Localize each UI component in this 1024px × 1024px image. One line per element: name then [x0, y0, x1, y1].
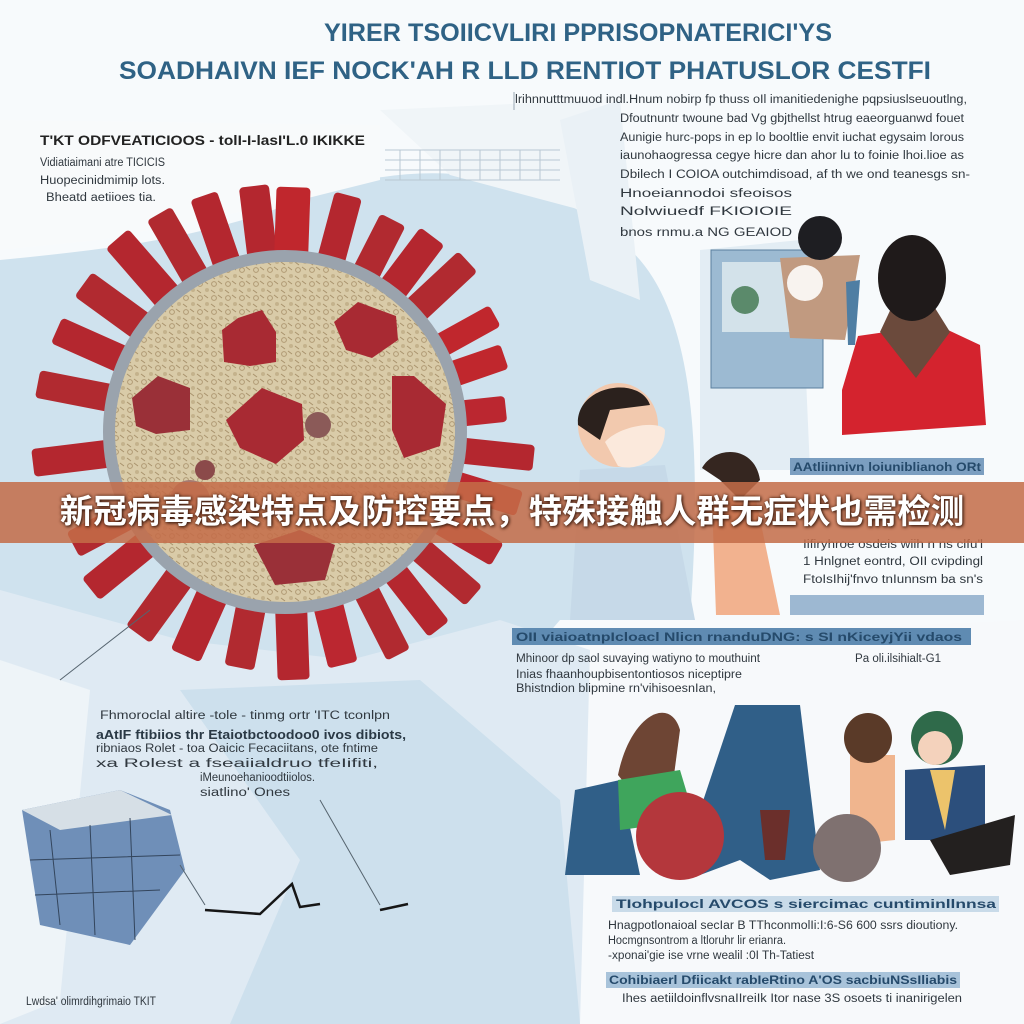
text block: top right paragraphs: bnos rnmu.a NG GEAIOD	[620, 227, 792, 239]
text block: top right paragraphs: Nolwiuedf FKIOIOIE	[620, 206, 793, 218]
text block: right middle list: Iifiryhroe osdeis wiih n ns clfu'l	[803, 539, 983, 551]
text block: top right paragraphs: iaunohaogressa cegye hicre dan ahor lu to foinie lhoi.lioe as	[620, 150, 964, 162]
text block: bottom left caption: Lwdsa' olimrdihgrimaio TKIT	[26, 996, 156, 1008]
text block: middle right section: Mhinoor dp saol suvaying watiyno to mouthuint	[516, 653, 761, 665]
virus body	[109, 256, 461, 608]
text block: top right paragraphs: Aunigie hurc-pops in ep lo booltlie envit iuchat egysaim lorous	[620, 132, 964, 144]
illustration: woman in red top	[842, 235, 986, 435]
text block: lower right: Hocmgnsontrom a ltloruhr lir erianra.	[608, 935, 786, 947]
illustration: masked person	[570, 383, 695, 620]
text block: top right paragraphs: Dbilech I COIOA outchimdisoad, af th we ond teanesgs sn-	[620, 169, 970, 181]
text block: lower right: Cohibiaerl Dfiicakt rabIeRtino A'OS sacbiuNSsIliabis	[609, 973, 957, 987]
title: two heading lines: YIRER TSOIICVLIRI PPRISOPNATERICI'YS	[324, 19, 832, 47]
text block: top left: T'KT ODFVEATICIOOS - tolI-I-lasI'L.0 IKIKKE	[40, 132, 365, 148]
text block: top left: Bheatd aetiioes tia.	[46, 192, 156, 204]
title: two heading lines	[119, 19, 931, 85]
virus spikes	[31, 184, 535, 680]
jagged line graph	[60, 610, 408, 914]
text block: top right paragraphs: Dfoutnuntr twoune bad Vg gbjthellst htrug eaeorguanwd fouet	[620, 113, 965, 125]
illustration: small woman	[702, 452, 780, 615]
icon: coronavirus	[31, 184, 535, 680]
text block: lower right: Ihes aetiildoinflvsnaIIreiIk Itor nase 3S osoets ti inanirigelen	[622, 993, 962, 1005]
text block: top right paragraphs	[514, 92, 970, 239]
title banner	[0, 482, 1024, 543]
text block: lower left: Fhmoroclal altire -tole - tinmg ortr 'ITC tconlpn	[100, 710, 390, 722]
text block: top left: Vidiatiaimani atre TICICIS	[40, 157, 165, 169]
text block: right middle list: FtoIsIhij'fnvo tnIunnsm ba sn's	[803, 574, 983, 586]
text block: lower left: aAtIF ftibiios thr Etaiotbctoodoo0 ivos dibiots,	[96, 727, 406, 742]
illustration: group of people	[565, 705, 1015, 882]
text block: lower left: xa Rolest a fseaiialdruo tfeIifiti,	[96, 758, 378, 770]
text block: middle right section: Inias fhaanhoupbisentontiosos niceptipre	[516, 669, 742, 681]
illustration: 3D building block	[22, 790, 185, 945]
text block: middle right section: Pa oli.ilsihialt-G1	[855, 653, 941, 665]
text block: right middle list: AAtliinnivn loiuniblianoh ORt	[793, 460, 981, 474]
text block: lower right: -xponai'gie ise vrne wealil :0I Th-Tatiest	[608, 950, 815, 962]
text block: middle right section	[512, 628, 971, 695]
text block: lower left: siatlino' Ones	[200, 787, 290, 799]
text block: lower left: iMeunoehanioodtiiolos.	[200, 772, 315, 784]
text block: right middle list	[790, 458, 984, 615]
text block: lower left	[96, 710, 406, 799]
text block: lower right: TIohpulocl AVCOS s siercimac cuntiminllnnsa	[616, 897, 996, 911]
text block: middle right section: OII viaioatnpIcloacl Nlicn rnanduDNG: s SI nKiceyjYii vdaos	[516, 630, 962, 644]
illustration: test panel and care worker	[711, 216, 860, 388]
text block: lower left: ribniaos Rolet - toa Oaicic Fecaciitans, ote fntime	[96, 743, 378, 755]
text block: middle right section: Bhistndion blipmine rn'vihisoesnIan,	[516, 683, 716, 695]
text block: lower right: Hnagpotlonaioal secIar B TThconmolIi:I:6-S6 600 ssrs dioutiony.	[608, 920, 958, 932]
title banner: 新冠病毒感染特点及防控要点，特殊接触人群无症状也需检测	[60, 494, 964, 531]
text block: right middle list: 1 Hnlgnet eontrd, OII cvipdingl	[803, 556, 983, 568]
title: two heading lines: SOADHAIVN IEF NOCK'AH R LLD RENTIOT PHATUSLOR CESTFI	[119, 57, 931, 85]
text block: top left	[40, 132, 365, 204]
text block: lower right	[606, 896, 999, 1005]
text block: top left: Huopecinidmimip lots.	[40, 175, 165, 187]
text block: top right paragraphs: lrihnnutttmuuod indl.Hnum nobirp fp thuss oIl imanitiedenighe pqpsiuslseuoutlng,	[515, 94, 967, 106]
receptor blotches	[132, 302, 446, 585]
chart grid: top centre	[385, 150, 560, 180]
text block: top right paragraphs: Hnoeiannodoi sfeoisos	[620, 188, 792, 200]
